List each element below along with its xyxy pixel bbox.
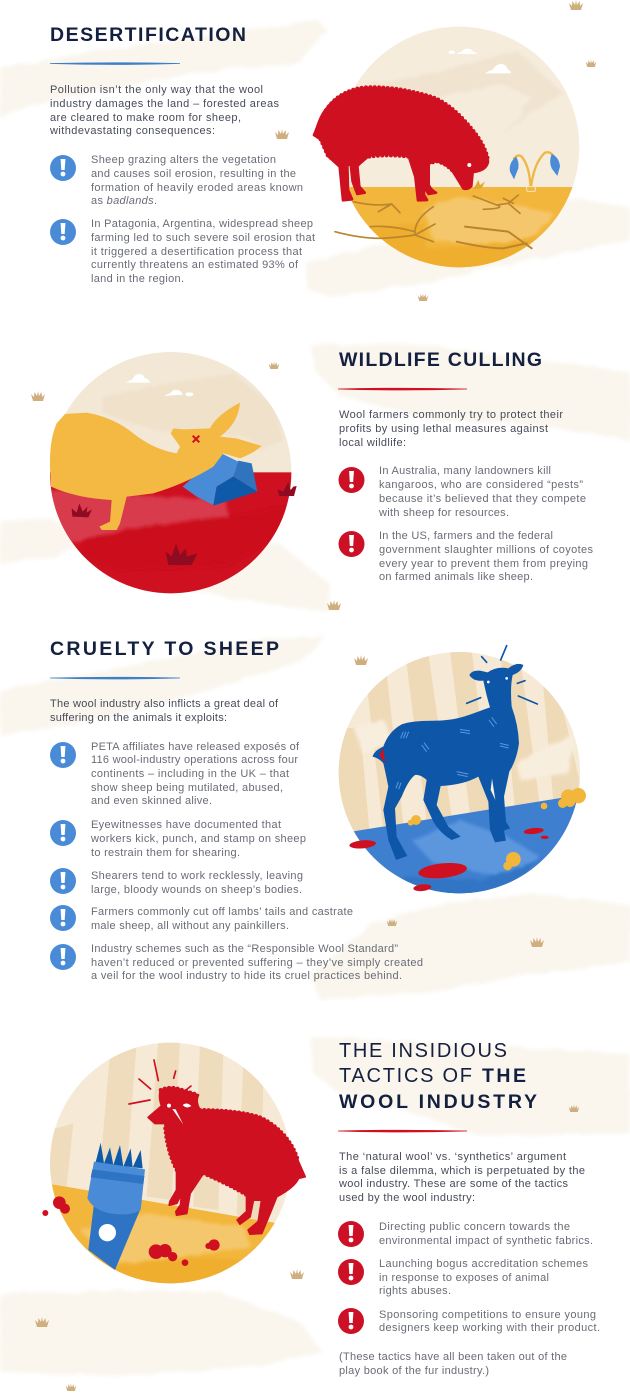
bullet text: as badlands.	[91, 195, 157, 207]
icon: blue alert	[50, 219, 76, 245]
illustration: dead kangaroo	[47, 350, 297, 596]
bullet text: PETA affiliates have released exposés of	[91, 741, 300, 753]
shock rays	[467, 646, 537, 704]
bullet text: show sheep being mutilated, abused,	[91, 782, 283, 794]
blood stains	[42, 1196, 220, 1266]
bullet text: male sheep, all without any painkillers.	[91, 920, 289, 932]
bullet text: Directing public concern towards the	[379, 1221, 570, 1233]
bullet: directing concern	[338, 1221, 593, 1247]
bullet text	[91, 154, 303, 207]
intro paragraph: Pollution isn’t the only way that the wool	[50, 84, 263, 96]
sheep body	[314, 87, 488, 200]
bullet text: continents – including in the UK – that	[91, 768, 289, 780]
kangaroo	[50, 403, 262, 530]
icon: blue alert	[50, 944, 76, 970]
sheep eye	[467, 163, 471, 167]
heading: insidious tactics: WOOL INDUSTRY	[339, 1091, 537, 1113]
bullet text: a veil for the wool industry to hide its cruel practices behind.	[91, 970, 402, 982]
bullet text: and even skinned alive.	[91, 795, 212, 807]
blood and stains	[349, 827, 549, 892]
panel: cruelty to sheep text	[50, 638, 423, 982]
icon: red alert	[338, 1221, 364, 1247]
bullet text: In Patagonia, Argentina, widespread sheep	[91, 218, 313, 230]
intro paragraph: local wildlife:	[339, 437, 406, 449]
heading: insidious tactics: THE INSIDIOUS	[339, 1040, 507, 1062]
icon: blue alert	[50, 868, 76, 894]
closing note: (These tactics have all been taken out of the	[339, 1351, 567, 1363]
heading rule	[338, 388, 467, 390]
bullet: competitions	[338, 1308, 600, 1334]
bullet text	[91, 943, 423, 982]
intro paragraph: suffering on the animals it exploits:	[50, 712, 227, 724]
scratches	[396, 717, 509, 789]
bullet: kangaroos	[338, 465, 586, 519]
closing note: play book of the fur industry.)	[339, 1365, 489, 1377]
panel: insidious tactics text	[338, 1040, 600, 1377]
intro paragraph: is a false dilemma, which is perpetuated by the	[339, 1165, 585, 1177]
icon: blue alert	[50, 742, 76, 768]
sheep face marks	[167, 1104, 191, 1125]
icon: red alert	[338, 1308, 364, 1334]
striped wall	[337, 650, 583, 837]
illustration: shears and frightened sheep	[42, 1040, 305, 1290]
bullet text: in response to exposes of animal	[379, 1272, 549, 1284]
heading: cruelty to sheep: CRUELTY TO SHEEP	[50, 638, 279, 660]
bullet: coyotes	[338, 530, 594, 583]
bullet text: Sheep grazing alters the vegetation	[91, 154, 276, 166]
intro paragraph: Wool farmers commonly try to protect their	[339, 409, 563, 421]
bullet text: rights abuses.	[379, 1285, 451, 1297]
ground	[349, 187, 572, 268]
bullet text: Sponsoring competitions to ensure young	[379, 1309, 596, 1321]
panel: desertification text	[49, 24, 315, 285]
bullet text: Shearers tend to work recklessly, leaving	[91, 870, 303, 882]
panel: wildlife culling text	[338, 349, 594, 583]
floor	[52, 1184, 275, 1284]
bullet: shearers	[50, 868, 303, 896]
lamb	[373, 664, 523, 860]
illustration: grazing sheep on cracked land	[314, 20, 587, 277]
heading rule	[50, 63, 180, 64]
lamb eyes	[487, 677, 508, 683]
bullet text: and causes soil erosion, resulting in the	[91, 168, 296, 180]
bullet: PETA	[50, 741, 300, 807]
bullet text: environmental impact of synthetic fabrics.	[379, 1235, 593, 1247]
bullet text: Farmers commonly cut off lambs’ tails and castrate	[91, 906, 353, 918]
heading: desertification: DESERTIFICATION	[50, 24, 246, 46]
wound on tail	[379, 748, 385, 763]
bullet text: it triggered a desertification process that	[91, 246, 302, 258]
bullet text: to restrain them for shearing.	[91, 847, 240, 859]
icon: red alert	[338, 1259, 364, 1285]
shear teeth	[95, 1143, 143, 1168]
intro paragraph: are cleared to make room for sheep,	[50, 112, 241, 124]
bullet text: haven’t reduced or prevented suffering – they’ve simply created	[91, 957, 423, 969]
sky	[348, 26, 580, 187]
bullet text: every year to prevent them from preying	[379, 558, 588, 570]
grass bits	[473, 180, 485, 189]
heading: insidious tactics	[339, 1040, 537, 1113]
icon: red alert	[338, 531, 364, 557]
intro paragraph: withdevastating consequences:	[49, 125, 215, 137]
ground	[47, 472, 297, 596]
bullet text: designers keep working with their product.	[379, 1322, 600, 1334]
shear head	[87, 1162, 145, 1214]
bullet text: because it’s believed that they compete	[379, 493, 586, 505]
intro paragraph	[50, 698, 279, 724]
bullet: farmers	[50, 905, 353, 932]
bullet: industry schemes	[50, 943, 423, 982]
intro paragraph: industry damages the land – forested areas	[50, 98, 280, 110]
bullet text: In the US, farmers and the federal	[379, 530, 553, 542]
leg gap	[491, 778, 495, 800]
striped wall	[47, 1040, 293, 1240]
ground cracks	[335, 195, 532, 248]
wilted plant	[510, 152, 560, 191]
floor	[354, 798, 576, 894]
bullet text	[91, 906, 353, 932]
closing note	[339, 1351, 567, 1377]
bullet: Patagonia	[50, 218, 315, 285]
bullet text: farming led to such severe soil erosion that	[91, 232, 315, 244]
bullet text: large, bloody wounds on sheep’s bodies.	[91, 884, 302, 896]
heading: insidious tactics: THE	[482, 1065, 526, 1087]
clouds	[448, 49, 511, 73]
clouds	[126, 374, 193, 396]
icon: blue alert	[50, 905, 76, 931]
heading rule	[338, 1130, 467, 1132]
intro paragraph: The ‘natural wool’ vs. ‘synthetics’ argument	[339, 1151, 566, 1163]
intro paragraph: wool industry. These are some of the tactics	[338, 1178, 568, 1190]
intro paragraph	[338, 1151, 585, 1204]
shears	[87, 1143, 145, 1270]
shock rays	[129, 1060, 191, 1104]
bullet text: formation of heavily eroded areas known	[91, 182, 303, 194]
heading: wildlife culling: WILDLIFE CULLING	[339, 349, 542, 371]
yellow stains	[408, 788, 586, 870]
bullet text: on farmed animals like sheep.	[379, 571, 533, 583]
bullet text: workers kick, punch, and stamp on sheep	[90, 833, 306, 845]
bullet text: land in the region.	[91, 273, 184, 285]
bullet: bogus schemes	[338, 1258, 588, 1297]
intro paragraph	[339, 409, 563, 449]
grass tufts	[72, 482, 297, 565]
bullet: grazing	[50, 154, 303, 207]
bullet text	[379, 1258, 588, 1297]
shear button	[99, 1224, 116, 1241]
rock	[183, 453, 257, 506]
bullet text: Launching bogus accreditation schemes	[379, 1258, 588, 1270]
dead eye	[193, 436, 199, 442]
intro paragraph	[49, 84, 280, 137]
bullet text	[379, 1309, 600, 1334]
heading rule	[50, 677, 180, 679]
bullet text: Eyewitnesses have documented that	[91, 819, 281, 831]
bullet text	[378, 465, 586, 519]
bullet text	[90, 819, 306, 859]
bullet text	[379, 530, 594, 583]
intro paragraph: used by the wool industry:	[339, 1192, 475, 1204]
bullet text: with sheep for resources.	[378, 507, 509, 519]
bullet text	[91, 218, 315, 285]
bullet: eyewitnesses	[50, 819, 306, 859]
icon: blue alert	[50, 820, 76, 846]
heading: insidious tactics: TACTICS OF	[339, 1065, 472, 1087]
illustration: injured blue lamb	[333, 646, 586, 897]
bullet text: government slaughter millions of coyotes	[379, 544, 594, 556]
sky	[47, 350, 297, 473]
icon: red alert	[338, 467, 364, 493]
shear handle	[88, 1203, 140, 1270]
intro paragraph: The wool industry also inflicts a great deal of	[50, 698, 279, 710]
bullet text: kangaroos, who are considered “pests”	[379, 479, 583, 491]
bullet text	[91, 741, 300, 807]
bullet text: 116 wool-industry operations across four	[91, 754, 298, 766]
bullet text: currently threatens an estimated 93% of	[91, 259, 299, 271]
intro paragraph: profits by using lethal measures against	[339, 423, 548, 435]
bullet text	[91, 870, 303, 896]
icon: blue alert	[50, 155, 76, 181]
bullet text: Industry schemes such as the “Responsible Wool Standard”	[91, 943, 398, 955]
sheep	[148, 1088, 305, 1234]
bullet text	[379, 1221, 593, 1247]
bullet text: In Australia, many landowners kill	[379, 465, 551, 477]
